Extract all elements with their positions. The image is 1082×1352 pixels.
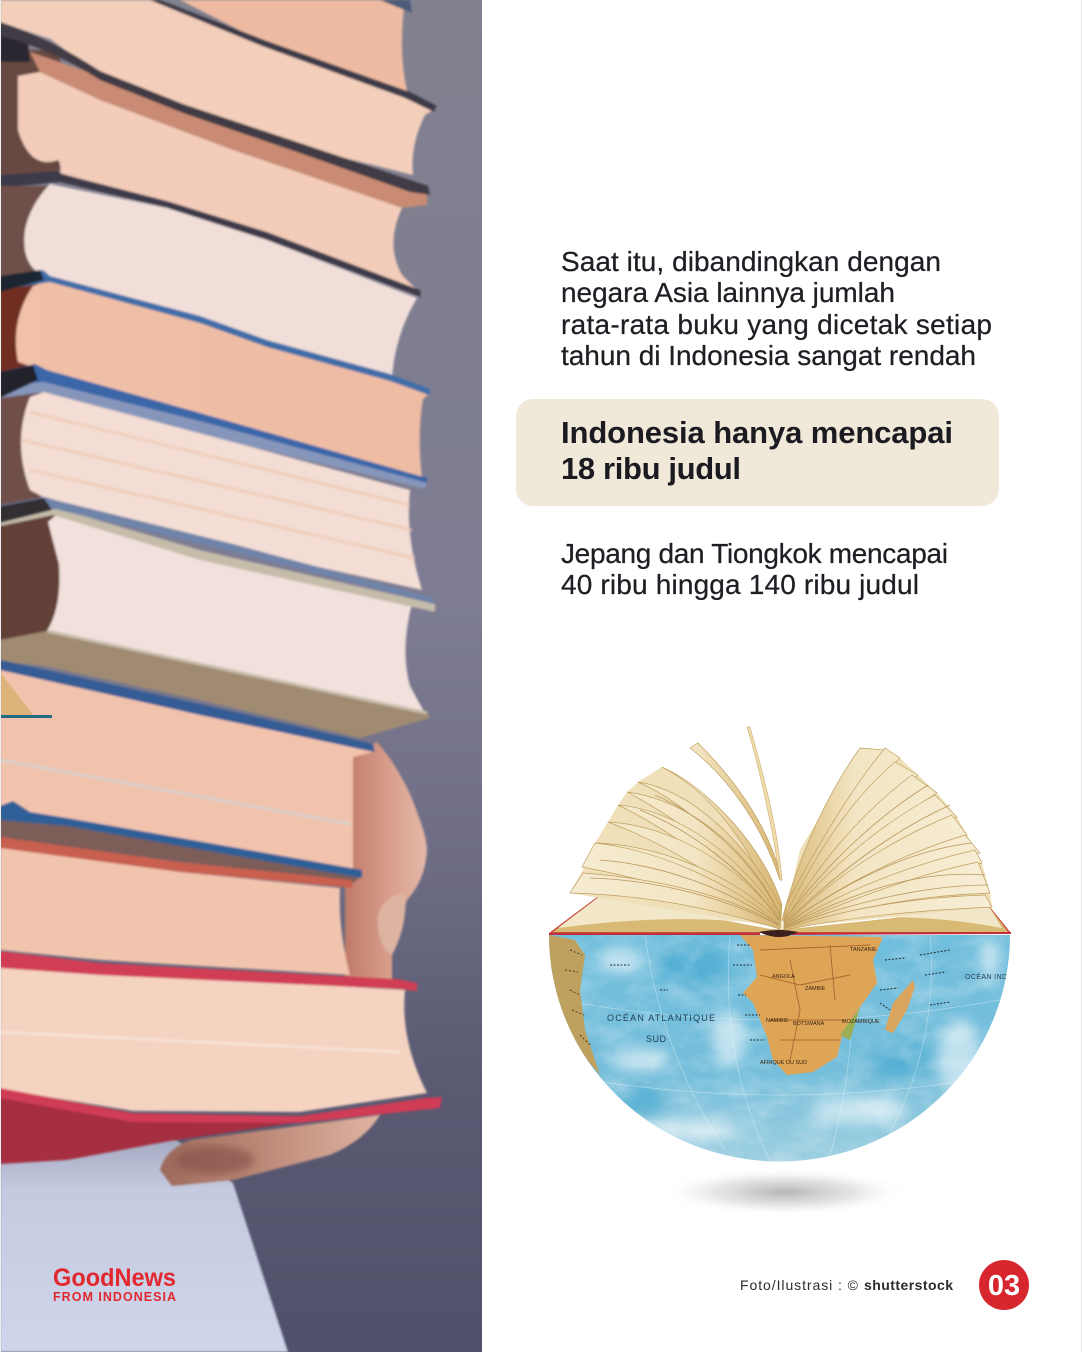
SUD label: SUD [646,1034,666,1044]
right flat page [790,895,1002,928]
deep ocean shading [614,943,930,1116]
badge circle [979,1260,1029,1310]
GoodNews wordmark: GoodNews [53,1264,176,1292]
globe shadow [660,1168,910,1216]
Africa country labels: AFRIQUE DU SUD [760,1060,807,1066]
left fan silhouette fill [570,767,782,928]
lower hand [160,1115,380,1186]
Africa country labels: MOZAMBIQUE [842,1019,880,1025]
cover 2 [0,22,430,195]
Africa country labels: BOTSWANA [793,1021,825,1027]
book 5 pages [21,392,422,590]
lighter blue cover 5 [0,378,427,489]
FROM INDONESIA line: FROM INDONESIA [53,1290,176,1304]
ocean clouds [598,938,1000,1142]
comparison paragraph: 40 ribu hingga 140 ribu judul [561,569,919,600]
book 3 pages [24,184,417,378]
book 10 pages [0,965,427,1112]
intro paragraph [561,246,992,371]
left white edge [0,0,1,1352]
dark spine end 5 [0,365,38,398]
intro paragraph: tahun di Indonesia sangat rendah [561,340,976,371]
OCEAN ATLANTIQUE label: OCÉAN ATLANTIQUE [607,1013,715,1023]
right fan of pages [782,748,992,930]
thumbnail [378,893,405,955]
right fan page edge lines [786,785,988,927]
intro paragraph: Saat itu, dibandingkan dengan [561,246,941,277]
OCEAN INDIEN label: OCÉAN IND [965,972,1007,981]
Africa country labels: ANGOLA [772,974,795,980]
tan cover bottom 6 [0,631,430,738]
book stack [0,0,442,1186]
Africa green highlights [840,1008,860,1040]
highlight background [516,399,999,506]
spine block behind top books [0,50,60,180]
left fan page edge lines [590,795,780,925]
peach book 7 pages [0,668,373,870]
Africa country labels: TANZANIE [850,947,877,953]
red-orange cover 8 [0,837,352,888]
South America [549,935,600,1075]
brown book 8 between covers [0,818,362,884]
logo: GoodNews from Indonesia [53,1264,176,1304]
left flat page [558,896,770,928]
open book [549,727,1011,937]
blue cover 4 [0,270,430,395]
book spine [759,930,798,937]
grey stripe on pages [0,760,350,824]
light edge of tan cover [47,631,427,713]
book red edge [549,933,1011,934]
centre standing page [747,727,782,880]
credit source: shutterstock [864,1277,953,1293]
highlight panel: Indonesia 18 ribu judul [516,399,999,506]
comparison paragraph: Jepang dan Tiongkok mencapai [561,538,948,569]
book 1 pages [0,0,437,175]
beige cover 6 [0,507,435,612]
underside dark red [0,1098,300,1164]
book 6 pages [47,515,427,717]
book 4 pages [16,280,428,478]
blue cover 5 [0,364,427,483]
meridians [560,935,1000,1160]
cloud texture [545,930,1015,1165]
illustration: open book on half globe [545,727,1015,1216]
credit label: Foto/Ilustrasi : © [740,1277,859,1293]
hand gripping the side [345,742,427,982]
ocean [545,930,1015,1165]
highlight text: Indonesia hanya mencapai [561,415,953,450]
top book cover strip [380,0,412,13]
dark shading on lower fingers [175,1146,255,1174]
page number badge [979,1260,1029,1310]
spine strip 5 [0,392,40,512]
Africa rivers and borders [760,945,870,1060]
map labels [607,972,1007,1044]
blue cover 7 [0,660,375,752]
book cover back [549,897,1011,933]
book page block [553,897,1008,932]
dark spine end 6 [0,498,52,523]
highlight text [561,415,953,486]
photo backdrop [0,0,482,1352]
tan cut-out triangle [0,672,33,715]
book 5 page stripes [22,412,415,558]
brown band below cover 2 [30,52,427,208]
dark spine block [0,35,30,62]
top book pages [180,0,407,91]
dark spine end 4 [0,270,44,292]
peach book 9 pages [0,848,350,975]
book 2 pages [18,72,420,293]
intro paragraph: negara Asia lainnya jumlah [561,277,895,308]
photo credit [740,1277,953,1293]
spine strip 6 [0,510,62,642]
Africa country labels [760,947,880,1066]
right fan silhouette fill [782,748,992,928]
left fan of pages [570,743,782,929]
comparison paragraph [561,538,948,600]
badge number: 03 [988,1270,1020,1302]
right page edge [1081,0,1082,1352]
half globe [545,930,1015,1165]
Madagascar [885,980,915,1033]
Africa country labels: NAMIBIE [766,1018,789,1024]
South America coast specks [565,950,590,1045]
faint page line [0,1032,400,1052]
blue cover 8 [0,801,362,878]
blue-grey edge 6 [0,497,434,604]
coastal city dashes [610,945,950,1040]
intro paragraph: rata-rata buku yang dicetak setiap [561,309,992,340]
highlight text: 18 ribu judul [561,451,741,486]
photo: stack of books held by hands [0,0,482,1352]
red cover 9 [0,951,417,991]
teal underline [0,715,52,718]
spine strip 3 [1,184,48,277]
shirt [0,1135,288,1352]
spine strip 4 [0,284,40,374]
Africa country labels: ZAMBIE [805,986,826,992]
cover 3 line [0,171,421,297]
cover 1 [150,0,437,112]
red cover 10 [0,1088,442,1123]
Africa [740,935,883,1075]
